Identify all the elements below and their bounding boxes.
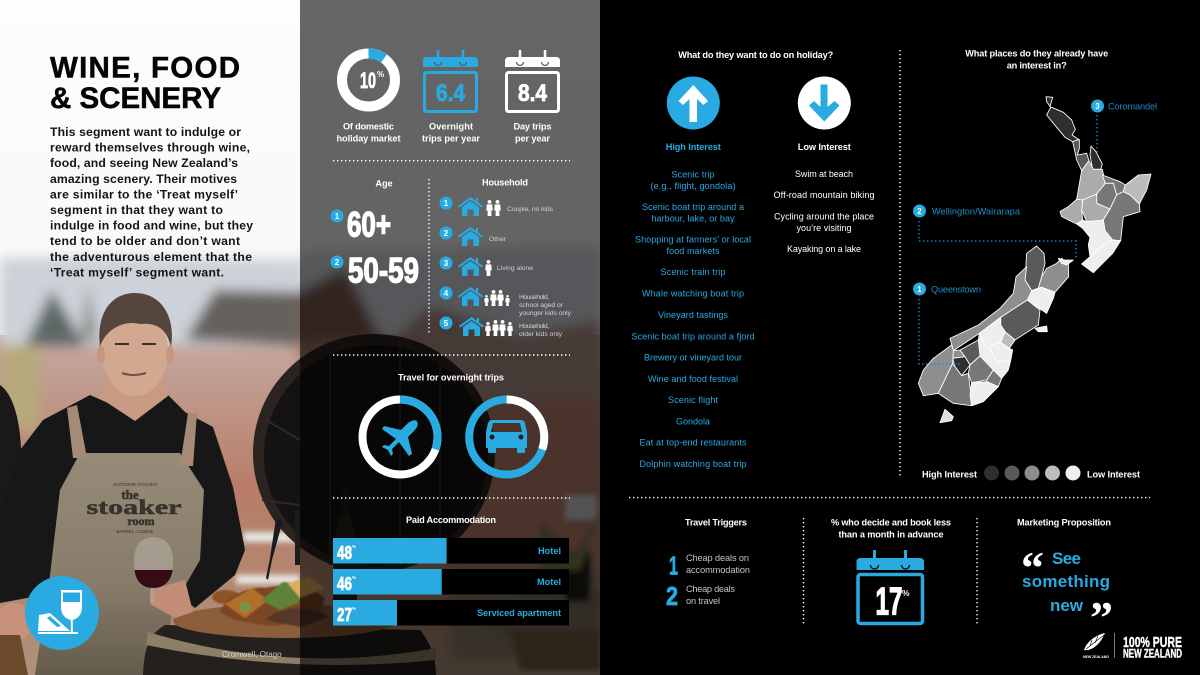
apron logo text — [86, 487, 182, 528]
travel triggers: 2 — [666, 581, 678, 611]
stat: day trips calendar: Day trips — [514, 122, 552, 132]
low interest column — [774, 76, 874, 254]
icon: calendar 17%: % — [902, 588, 910, 598]
stat: day trips calendar: 8.4 — [518, 80, 548, 107]
left barrel — [0, 385, 21, 525]
wine barrel upright — [253, 334, 495, 572]
age heading and values — [330, 178, 419, 290]
bar: hotel: 48 — [337, 543, 352, 563]
household 5: older kids only — [519, 331, 563, 338]
household 5: Household, — [519, 323, 549, 330]
intro text: amazing scenery. Their motives — [50, 172, 237, 186]
donut: car travel — [469, 399, 544, 474]
intro text: reward themselves through wine, — [50, 141, 250, 155]
high interest list: (e.g., flight, gondola) — [650, 181, 736, 191]
household list — [440, 178, 572, 338]
apron small text — [113, 482, 157, 534]
high interest list: Shopping at farmers’ or local — [635, 234, 751, 244]
household 1: 1 — [444, 199, 449, 208]
bar: hotel: Hotel — [538, 546, 561, 556]
high interest list: harbour, lake, or bay — [652, 214, 735, 224]
household 4: 4 — [444, 289, 449, 298]
household 3: Living alone — [497, 265, 533, 272]
places heading: an interest in? — [1007, 60, 1067, 70]
low interest list: Swim at beach — [795, 169, 853, 179]
high interest list: Scenic trip — [672, 170, 714, 180]
bar: serviced apartment — [333, 600, 569, 626]
logo: 100% Pure New Zealand — [1083, 633, 1182, 660]
age heading and values: 1 — [335, 212, 340, 221]
travel triggers: Cheap deals — [686, 584, 735, 594]
icon: calendar 17% — [856, 550, 924, 624]
callout: Wellington/Wairarapa: 2 — [917, 207, 922, 216]
high interest list: Vineyard tastings — [658, 310, 728, 320]
callout: Wellington/Wairarapa: Wellington/Wairarapa — [932, 206, 1021, 216]
marketing proposition — [1017, 518, 1113, 643]
travel for overnight trips: Travel for overnight trips — [398, 372, 504, 382]
bar: hotel: % — [352, 544, 356, 549]
high interest list: food markets — [666, 246, 720, 256]
callout: Queenstown — [913, 282, 981, 364]
stat: overnight trips calendar: Overnight — [429, 122, 473, 132]
holiday activities heading: What do they want to do on holiday? — [678, 50, 834, 60]
marketing proposition: Marketing Proposition — [1017, 518, 1111, 528]
apron logo text: room — [127, 514, 155, 528]
callout: Wellington/Wairarapa — [913, 204, 1076, 259]
quote: something — [1022, 572, 1110, 591]
title: & SCENERY — [50, 82, 221, 115]
household 3 — [440, 256, 533, 276]
photo credit: Cromwell, Otago — [222, 650, 282, 659]
apron small text: OUTDOOR KITCHEN — [113, 482, 157, 487]
booking lead time — [831, 518, 951, 624]
quote: new — [1050, 596, 1084, 615]
low interest list: Off-road mountain biking — [774, 190, 874, 200]
high interest list: Scenic boat trip around a fjord — [632, 332, 754, 342]
travel triggers: Travel Triggers — [685, 518, 747, 528]
deck table — [236, 495, 600, 670]
high interest list: Whale watching boat trip — [642, 288, 744, 298]
apron logo text: stoaker — [86, 495, 182, 519]
South Island — [918, 246, 1073, 423]
photo: winemaker with barrels — [0, 0, 600, 675]
map legend: Low Interest — [1087, 470, 1140, 480]
household 5 — [440, 316, 563, 338]
knives — [266, 511, 300, 580]
icon: silver fern: NEW ZEALAND — [1083, 655, 1109, 659]
high interest list: Wine and food festival — [648, 374, 738, 384]
quote: “ — [1021, 542, 1044, 593]
stat: overnight trips calendar: trips per year — [422, 134, 480, 144]
age heading and values: 60+ — [347, 206, 391, 244]
household 3: 3 — [444, 259, 449, 268]
low interest list — [774, 169, 874, 254]
high interest list: Scenic train trip — [660, 267, 726, 277]
bar: motel: Motel — [537, 577, 561, 587]
bar: hotel — [333, 538, 569, 564]
callout: Queenstown: 1 — [917, 285, 922, 294]
paid accommodation — [333, 515, 569, 626]
low interest list: you’re visiting — [796, 223, 852, 233]
apron logo text: the — [121, 487, 139, 502]
travel triggers — [666, 518, 750, 611]
intro text: tend to be older and don’t want — [50, 234, 240, 248]
stat: 10% of domestic holiday market: holiday market — [336, 134, 400, 144]
stat: day trips calendar — [505, 50, 560, 144]
low interest column: Low Interest — [798, 142, 851, 152]
stat: 10% of domestic holiday market: % — [377, 70, 384, 79]
map legend — [922, 466, 1140, 480]
quote — [1021, 542, 1113, 643]
icon: calendar 17%: 17 — [876, 580, 902, 624]
bar: serviced apartment: 27 — [337, 605, 352, 625]
intro text: ‘Treat myself’ segment want. — [50, 265, 224, 279]
intro text: are similar to the ‘Treat myself’ — [50, 187, 238, 201]
person — [0, 293, 245, 675]
household list: Household — [482, 178, 528, 188]
North Island — [1046, 97, 1151, 273]
travel triggers: on travel — [686, 596, 720, 606]
household 4: Household, — [519, 294, 549, 301]
stat: 10% of domestic holiday market: Of domestic — [343, 122, 394, 132]
age heading and values: 50-59 — [348, 252, 419, 290]
household 1 — [440, 196, 554, 216]
dark overlay on middle panel — [300, 0, 600, 675]
high interest list: Brewery or vineyard tour — [644, 352, 742, 362]
stat: day trips calendar: per year — [515, 134, 550, 144]
low interest list: Kayaking on a lake — [787, 244, 861, 254]
travel triggers: 1 — [669, 550, 678, 580]
high interest list: Scenic flight — [668, 395, 718, 405]
quote: ” — [1090, 592, 1113, 643]
travel triggers: Cheap deals on — [686, 553, 749, 563]
map of New Zealand — [918, 97, 1151, 423]
high interest column: High Interest — [666, 142, 721, 152]
intro text: segment in that they want to — [50, 203, 223, 217]
bar: motel: 46 — [337, 574, 352, 594]
icon: up arrow — [667, 76, 720, 130]
map legend: High Interest — [922, 470, 977, 480]
bar: serviced apartment: % — [352, 606, 356, 611]
bar: motel: % — [352, 575, 356, 580]
low interest list: Cycling around the place — [774, 212, 874, 222]
bar: motel — [333, 569, 569, 594]
intro text: indulge in food and wine, but they — [50, 219, 253, 233]
travel for overnight trips — [362, 372, 544, 474]
high interest list: Scenic boat trip around a — [642, 202, 744, 212]
stat: 10% of domestic holiday market — [336, 54, 400, 144]
travel triggers: accommodation — [686, 565, 750, 575]
stat: 10% of domestic holiday market: 10 — [360, 68, 376, 93]
icon: down arrow — [798, 76, 851, 130]
household 5: 5 — [444, 319, 449, 328]
high interest list: Gondola — [676, 416, 710, 426]
icon: wine and cheese — [25, 576, 99, 650]
food plate — [212, 576, 330, 627]
age heading and values: 2 — [335, 258, 340, 267]
wine bottle — [333, 487, 357, 610]
household 2 — [440, 226, 507, 246]
intro text: the adventurous element that the — [50, 250, 252, 264]
stat: overnight trips calendar — [422, 50, 480, 144]
intro text: This segment want to indulge or — [50, 125, 241, 139]
age heading and values: Age — [375, 178, 393, 188]
high interest list — [632, 170, 754, 469]
paid accommodation: Paid Accommodation — [406, 515, 496, 525]
high interest list: Dolphin watching boat trip — [640, 459, 746, 469]
title: WINE, FOOD — [50, 52, 240, 84]
callout: Coromandel: Coromandel — [1108, 102, 1157, 112]
barrel table — [0, 604, 436, 675]
places heading: What places do they already have — [965, 48, 1108, 58]
booking lead time: % who decide and book less — [831, 518, 951, 528]
callout: Queenstown: Queenstown — [931, 284, 981, 294]
high interest column — [632, 76, 754, 469]
intro text — [50, 125, 253, 279]
intro text: food, and seeing New Zealand’s — [50, 156, 238, 170]
quote: See — [1052, 549, 1081, 568]
donut: air travel — [362, 399, 438, 474]
high interest list: Eat at top-end restaurants — [640, 438, 747, 448]
household 4 — [440, 286, 572, 317]
household 1: Couple, no kids — [507, 206, 554, 213]
household 4: younger kids only — [519, 310, 572, 317]
apron small text: BARREL CUISINE — [116, 529, 154, 534]
household 4: school aged or — [519, 302, 564, 309]
right black panel — [600, 0, 1200, 675]
household 2: 2 — [444, 229, 449, 238]
stat: overnight trips calendar: 6.4 — [436, 80, 466, 107]
hand and wine glass — [134, 537, 193, 618]
household 2: Other — [489, 236, 507, 243]
callout: Coromandel: 3 — [1095, 102, 1100, 111]
booking lead time: than a month in advance — [838, 530, 944, 540]
bar: serviced apartment: Serviced apartment — [477, 608, 561, 618]
callout: Coromandel — [1091, 100, 1157, 153]
